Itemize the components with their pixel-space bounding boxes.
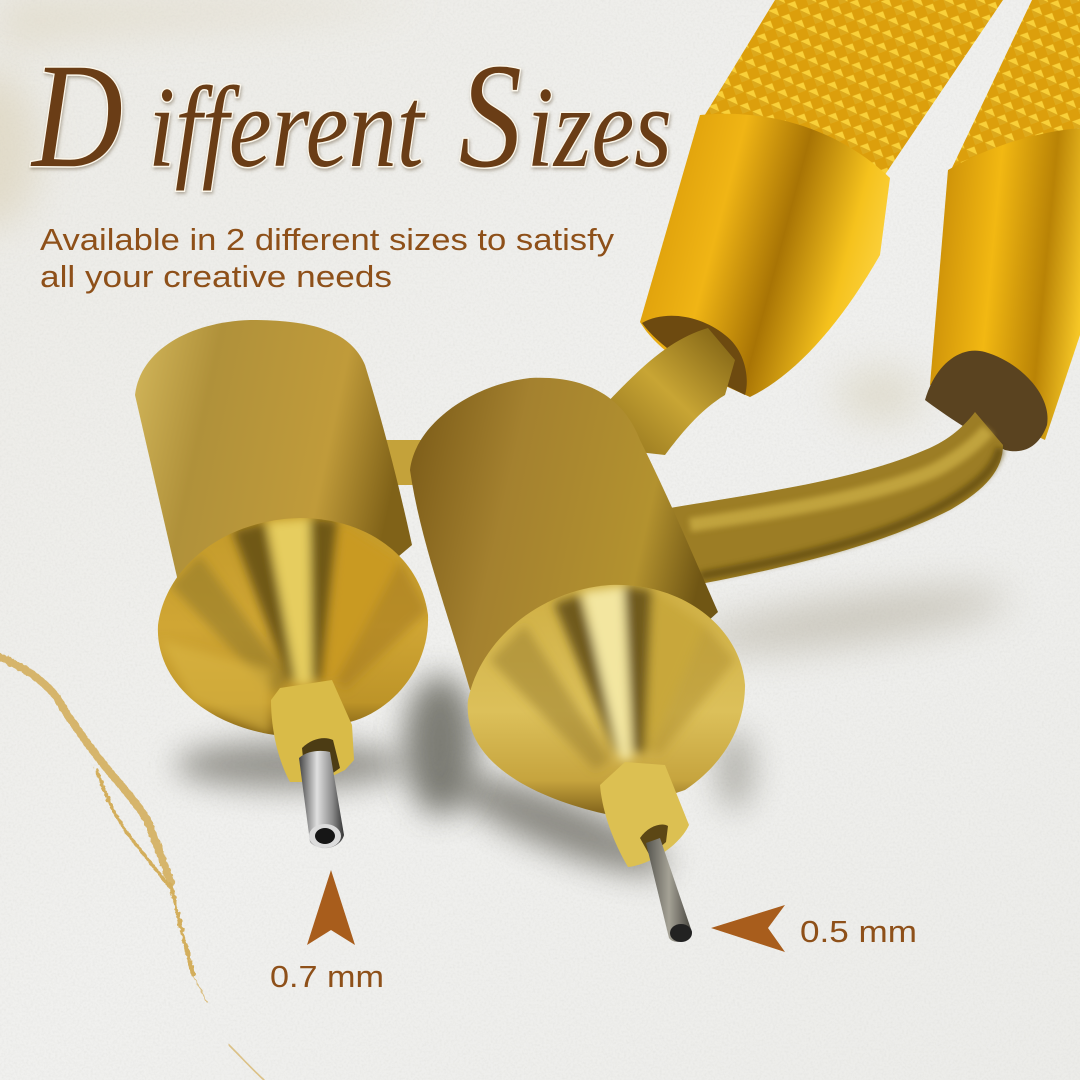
dark ferrule	[642, 316, 747, 395]
subtitle: Available in 2 different sizes to satisfy	[40, 222, 615, 257]
cone stripes	[490, 586, 735, 770]
gold dust streak	[0, 657, 264, 1080]
cylinder body	[410, 378, 718, 720]
arrow: 0.7 mm	[307, 870, 355, 945]
subtitle: all your creative needs	[40, 259, 392, 294]
needle 0.7 mm	[299, 751, 344, 848]
right rod	[670, 412, 1003, 586]
brown end cap	[925, 351, 1048, 451]
tip collar	[600, 762, 689, 867]
right gold handle	[925, 0, 1080, 451]
left rod	[600, 328, 735, 455]
label: 0.7 mm: 0.7 mm	[270, 959, 384, 994]
subtitle	[40, 222, 615, 294]
tapered collar	[640, 114, 890, 397]
cone face	[158, 518, 428, 735]
arrow: 0.5 mm	[711, 905, 785, 952]
connector stub	[385, 440, 435, 485]
cast shadows	[175, 367, 1012, 892]
left gold handle	[640, 0, 1003, 397]
cylinder body	[135, 320, 412, 640]
knurled grip	[703, 0, 1003, 182]
0.5 mm roller tool	[410, 378, 745, 942]
tip collar	[271, 680, 354, 782]
needle 0.5 mm	[646, 838, 692, 942]
cone face	[468, 585, 745, 815]
knurled grip	[950, 0, 1080, 172]
tapered collar	[930, 128, 1080, 440]
cone stripes	[160, 518, 428, 735]
brass rods	[385, 328, 1003, 586]
title: DifferentSizes	[30, 33, 672, 198]
label: 0.5 mm: 0.5 mm	[800, 914, 917, 949]
0.7 mm roller tool	[135, 320, 428, 848]
